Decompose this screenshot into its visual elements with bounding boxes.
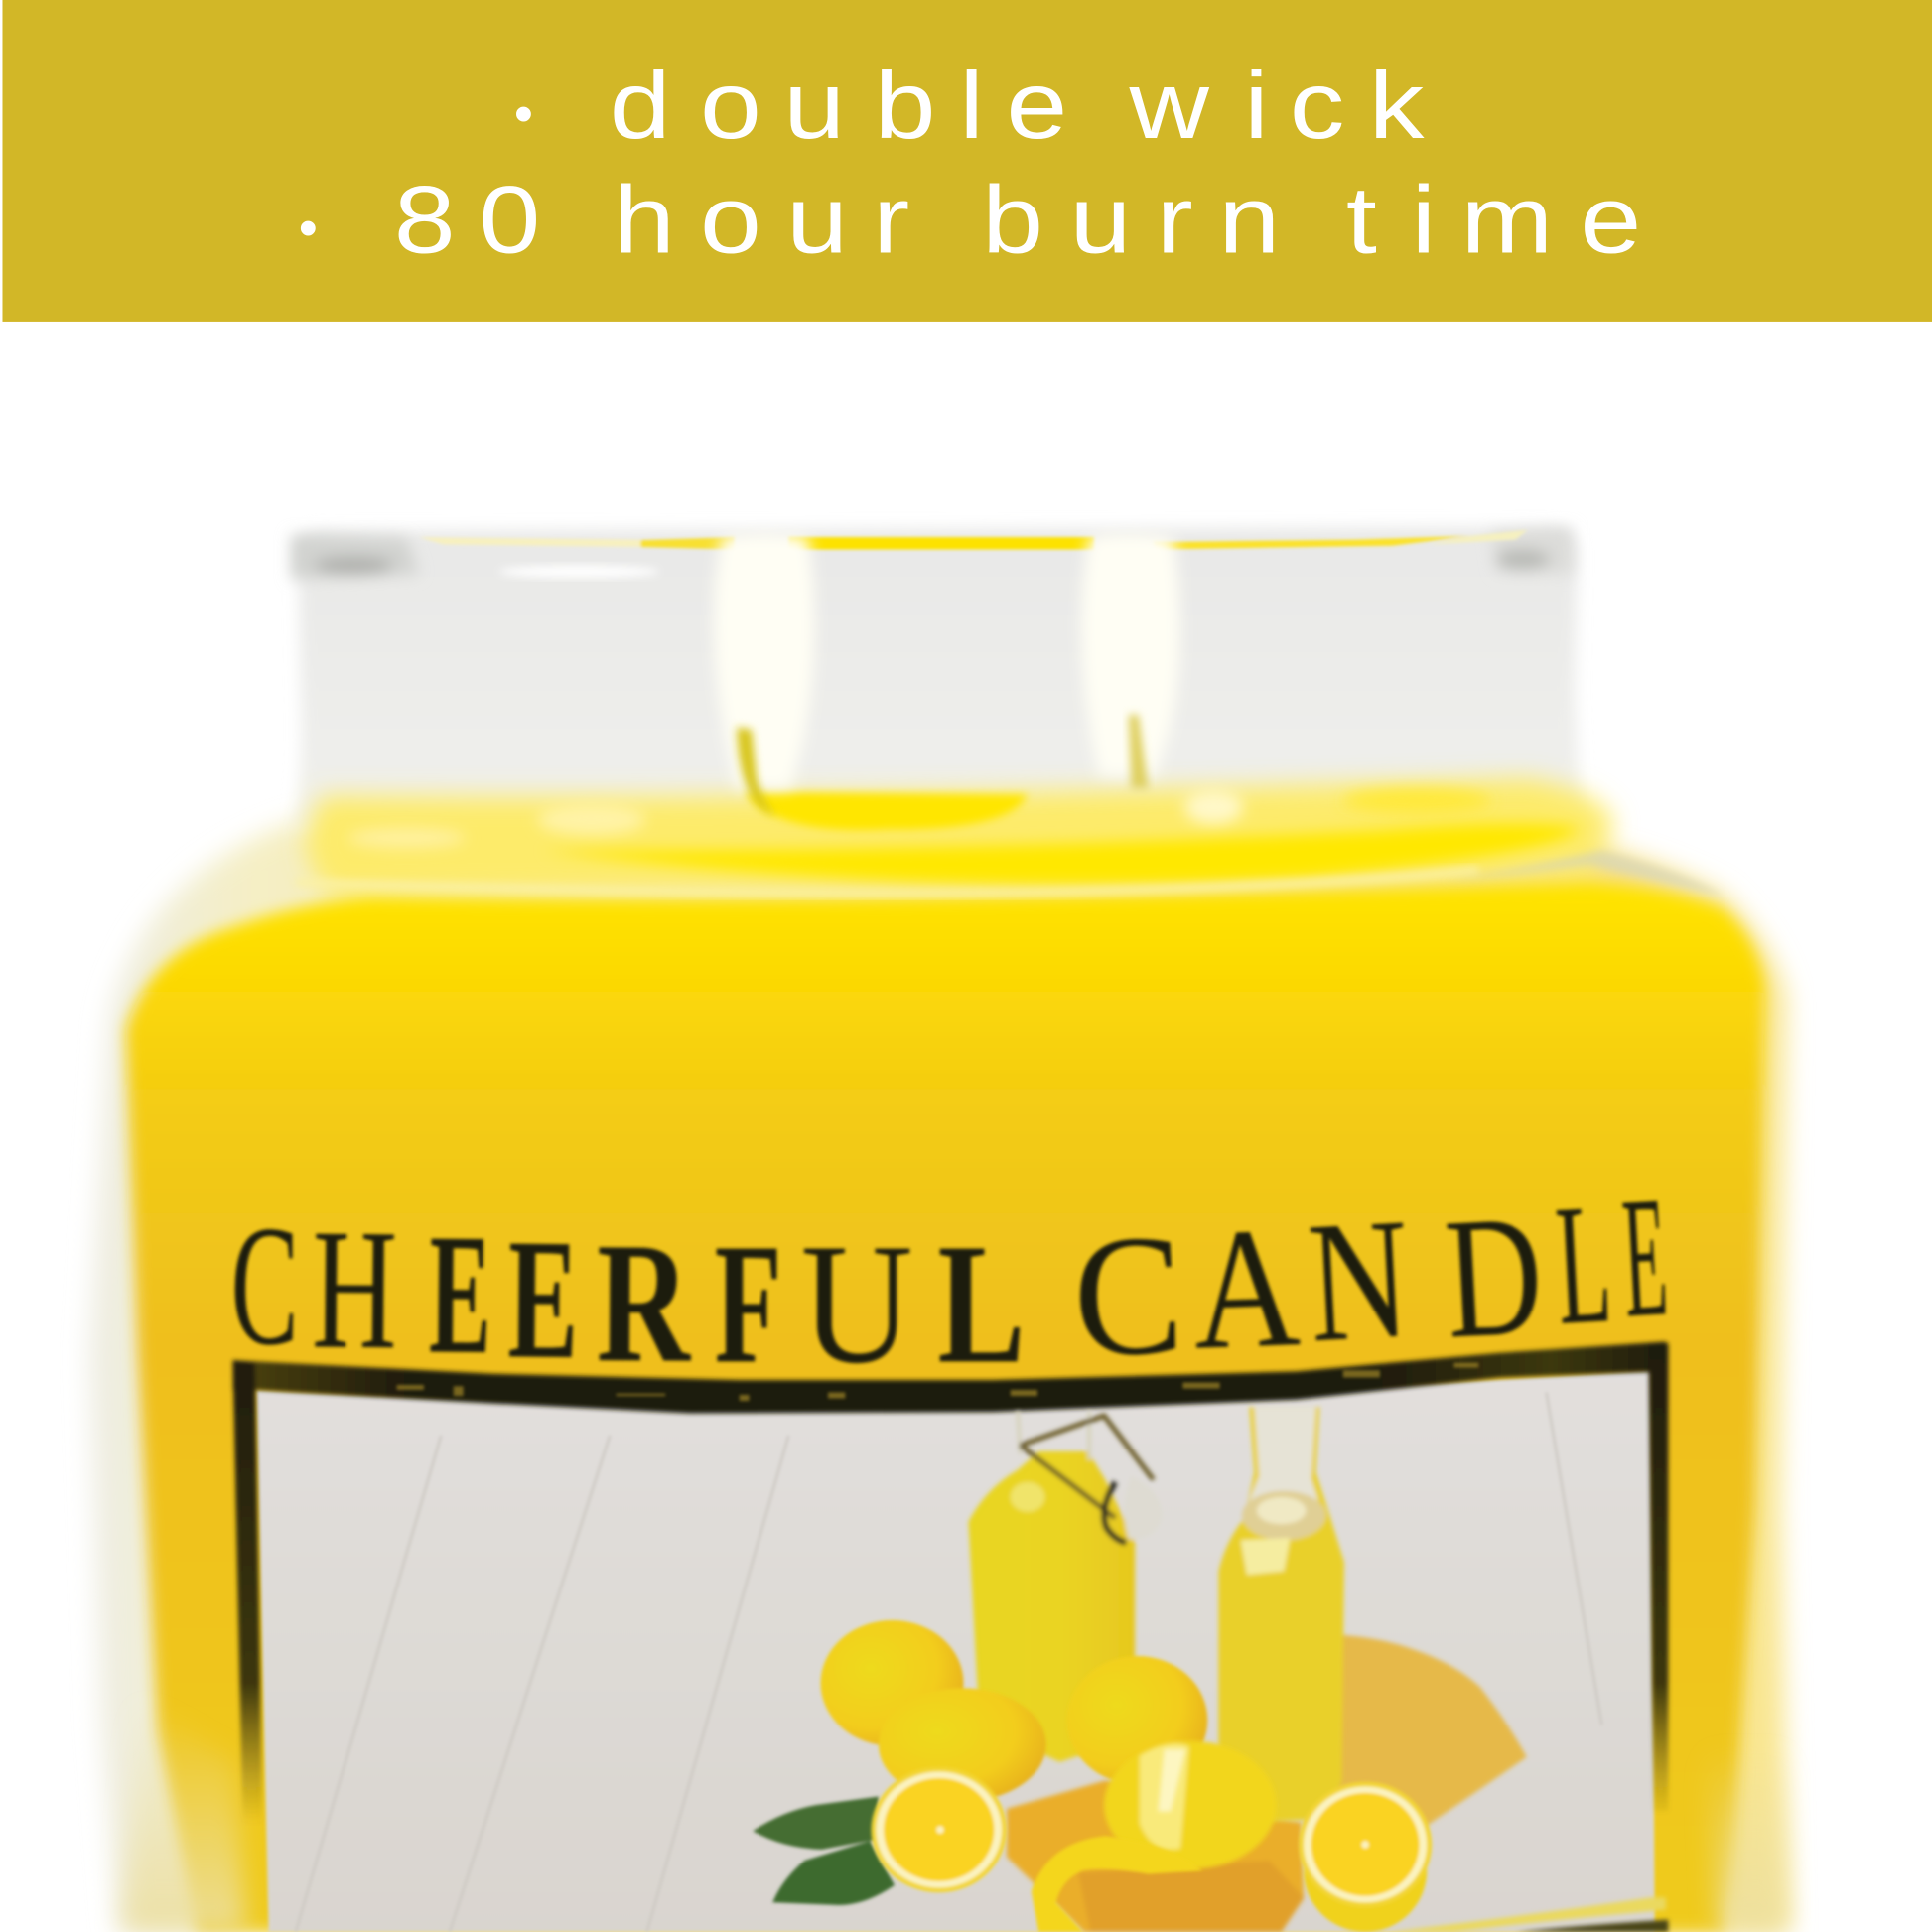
flames bbox=[714, 533, 1179, 788]
frame texture bbox=[397, 1363, 1478, 1401]
wax highlights bbox=[347, 788, 1491, 848]
swing-top plug bbox=[1124, 1476, 1162, 1539]
label picture background bbox=[256, 1370, 1655, 1932]
brand name: C bbox=[230, 1189, 300, 1381]
brand name: F bbox=[715, 1208, 782, 1400]
leaves bbox=[753, 1796, 895, 1905]
brand name: E bbox=[1618, 1161, 1672, 1353]
brand name: D bbox=[1441, 1178, 1547, 1375]
feature line: double wick: double wick bbox=[610, 53, 1425, 159]
candle body solid wax bbox=[126, 883, 1764, 1932]
whole lemons bbox=[821, 1620, 1207, 1801]
product label bbox=[233, 1342, 1668, 1932]
flame left bbox=[714, 533, 815, 788]
jar neck glass bbox=[293, 527, 1583, 832]
rim shadows bbox=[291, 527, 1573, 579]
lemon slice right bbox=[1299, 1782, 1432, 1932]
melted wax pool bbox=[745, 792, 1028, 830]
wick right bbox=[1129, 715, 1149, 788]
feature line: double wick: • bbox=[514, 83, 533, 144]
brand name: H bbox=[312, 1194, 398, 1386]
brand name: U bbox=[801, 1208, 913, 1399]
banner background bbox=[2, 0, 1932, 322]
flame right bbox=[1081, 533, 1179, 776]
wax crescent bbox=[542, 824, 1580, 885]
outer glass body bbox=[88, 788, 1789, 1932]
swing-top wire bbox=[1021, 1416, 1154, 1518]
cutting board bbox=[1007, 1635, 1527, 1932]
brand name: R bbox=[596, 1207, 692, 1399]
feature line: burn time: • bbox=[299, 198, 318, 258]
banner bbox=[2, 0, 1932, 322]
bottle right bbox=[1218, 1407, 1344, 1824]
wood plank lines bbox=[296, 1392, 1601, 1932]
shoulder grey glint bbox=[1442, 850, 1725, 897]
lemon slice left bbox=[871, 1767, 1007, 1892]
wick left bbox=[737, 727, 776, 816]
fade bottom right bbox=[1707, 1749, 1787, 1932]
wax surface, pale band bbox=[307, 778, 1614, 895]
brand name: N bbox=[1305, 1183, 1414, 1379]
brand name: L bbox=[937, 1208, 1026, 1400]
brand name: E bbox=[507, 1204, 579, 1396]
feature line: burn time: 80 hour burn time bbox=[394, 167, 1641, 274]
brand name bbox=[230, 1161, 1672, 1400]
brand name: E bbox=[429, 1199, 492, 1391]
yellow rim line bbox=[419, 530, 1528, 550]
pale shoulder line bbox=[296, 870, 1478, 894]
peeled lemon bbox=[1104, 1741, 1277, 1869]
fade bottom left bbox=[123, 1701, 246, 1932]
brand name: L bbox=[1552, 1167, 1615, 1361]
photo: candle jar bbox=[88, 527, 1789, 1932]
lemon peel bbox=[1032, 1836, 1202, 1932]
brand name: C bbox=[1070, 1198, 1186, 1393]
label frame bbox=[233, 1342, 1668, 1932]
glass highlight bbox=[499, 566, 659, 578]
bottle left bbox=[968, 1411, 1162, 1762]
brand name: A bbox=[1189, 1190, 1303, 1385]
